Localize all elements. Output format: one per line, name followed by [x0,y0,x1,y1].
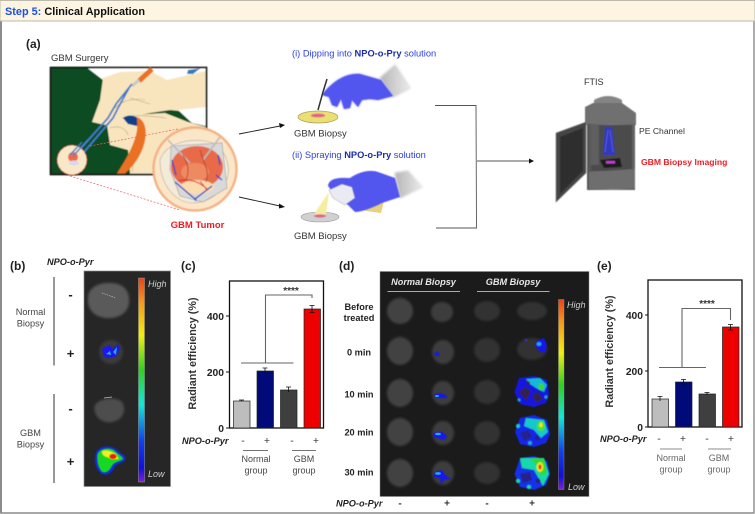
panel: (c) bar chart: + [313,435,319,447]
group labels: group [292,466,316,476]
colour scale [138,278,144,482]
header bar [0,0,755,21]
image: tissue series [84,271,170,486]
axis title: Radiant efficiency (%) [604,295,616,408]
label: normal biopsy: Normal [16,307,45,317]
error bars [239,306,314,402]
panel: (d) time series imaging [336,259,589,510]
group labels [241,450,316,476]
group brackets [53,277,55,483]
illustration: spraying hand [301,171,422,222]
label: biopsy two: GBM Biopsy [294,231,347,242]
group labels: group [707,464,731,474]
panel: (e) bar chart: - [657,433,661,445]
label: low: Low [148,469,165,479]
label: GBM Tumor: GBM Tumor [171,220,225,231]
axis ticks: 200 [207,368,224,379]
bars [652,327,739,427]
tissue rows [387,298,547,487]
illustration: FTIS instrument [556,96,636,202]
column headers: GBM Biopsy [486,277,541,287]
axis ticks [207,312,224,435]
significance bracket: **** [699,299,715,310]
label: biopsy one: GBM Biopsy [294,128,347,140]
label: high: High [148,279,167,289]
normal biopsy highlight [435,395,441,475]
panel label d: (d) [339,259,354,273]
label: normal biopsy: Biopsy [17,318,45,328]
axis ticks: 0 [637,423,643,434]
plot frame [648,280,742,427]
panel label e: (e) [597,259,612,273]
axis ticks: 400 [207,312,224,323]
normal biopsy signal [433,352,451,484]
axis ticks: 400 [626,311,643,322]
time labels: Before [344,302,374,312]
label: probe: NPO-o-Pyr [47,257,94,267]
label: low: Low [568,482,585,492]
significance bracket: **** [283,286,299,297]
time labels: 30 min [344,468,374,478]
treatment row: NPO-o-Pyr [336,498,383,508]
panel: (d) time series imaging: + [444,498,450,510]
title: Step 5: Clinical Application [5,6,145,18]
group labels: group [244,466,268,476]
illustration: dipping hand [298,65,410,123]
axis title: Radiant efficiency (%) [187,297,199,410]
signs: - [68,401,73,416]
group labels: Normal [656,453,686,463]
axis ticks: 0 [218,424,224,435]
column headers [391,277,541,287]
label: GBM Biopsy Imaging: GBM Biopsy Imaging [641,157,727,167]
column headers: Normal Biopsy [391,277,457,287]
panel: (c) bar chart: - [241,435,245,447]
arrow: to dipping [239,123,285,134]
time labels: treated [344,313,374,323]
panel: (d) time series imaging: - [398,498,402,510]
group labels: Normal [241,454,271,464]
label: GBM biopsy: Biopsy [17,440,45,450]
colour scale [558,300,564,490]
text: dipping step: (i) Dipping into NPO-o-Pry solution [292,48,436,58]
panel: (d) time series imaging: - [485,498,489,510]
panel label b: (b) [10,259,25,273]
GBM signal 20 min [515,415,550,447]
label: high: High [567,300,586,310]
time labels: 20 min [344,428,374,438]
panel: (c) bar chart: + [264,435,270,447]
panel: (e) bar chart: + [680,433,686,445]
group labels: group [659,464,683,474]
time labels [344,302,374,478]
GBM signal 0 min [525,338,547,353]
panel: (e) bar chart [597,259,742,474]
treatment row: NPO-o-Pyr [182,436,229,446]
signs: + [67,454,75,469]
panel label c: (c) [181,259,196,273]
label: FTIS: FTIS [584,77,604,87]
signs [67,287,75,469]
significance bracket [659,299,730,368]
GBM signal 30 min [514,456,550,490]
group labels [656,449,731,474]
group labels: GBM [294,454,314,464]
axis ticks: 200 [626,367,643,378]
bars [234,309,320,428]
significance bracket [241,286,312,363]
plot frame [230,281,324,428]
image: time series [380,272,589,496]
signs: - [68,287,73,302]
panel: (d) time series imaging: + [529,498,535,510]
time labels: 0 min [347,348,371,358]
callout lines [70,129,180,210]
small tumour site [57,140,88,175]
treatment row: NPO-o-Pyr [600,434,647,444]
illustration: surgery [50,68,206,174]
label: PE Channel: PE Channel [639,126,685,136]
panel: (b) biopsy imaging [10,257,170,486]
panel: (a) clinical workflow [26,37,727,242]
panel label a: (a) [26,37,41,51]
panel: (e) bar chart: - [705,433,709,445]
connector bracket and arrow [435,106,534,228]
label: GBM biopsy: GBM [20,428,41,438]
axis ticks [626,311,643,434]
panel: (e) bar chart: + [728,433,734,445]
time labels: 10 min [344,390,374,400]
signs: + [67,346,75,361]
heading: GBM Surgery: GBM Surgery [51,53,109,64]
GBM signal 10 min [514,376,549,407]
text: spraying step: (ii) Spraying NPO-o-Pry solution [292,150,426,160]
arrow: to spraying [239,197,285,208]
group labels: GBM [709,453,729,463]
panel: (c) bar chart [181,259,324,476]
error bars [658,324,733,401]
panel: (c) bar chart: - [290,435,294,447]
zoomed tumour circle [154,128,236,210]
